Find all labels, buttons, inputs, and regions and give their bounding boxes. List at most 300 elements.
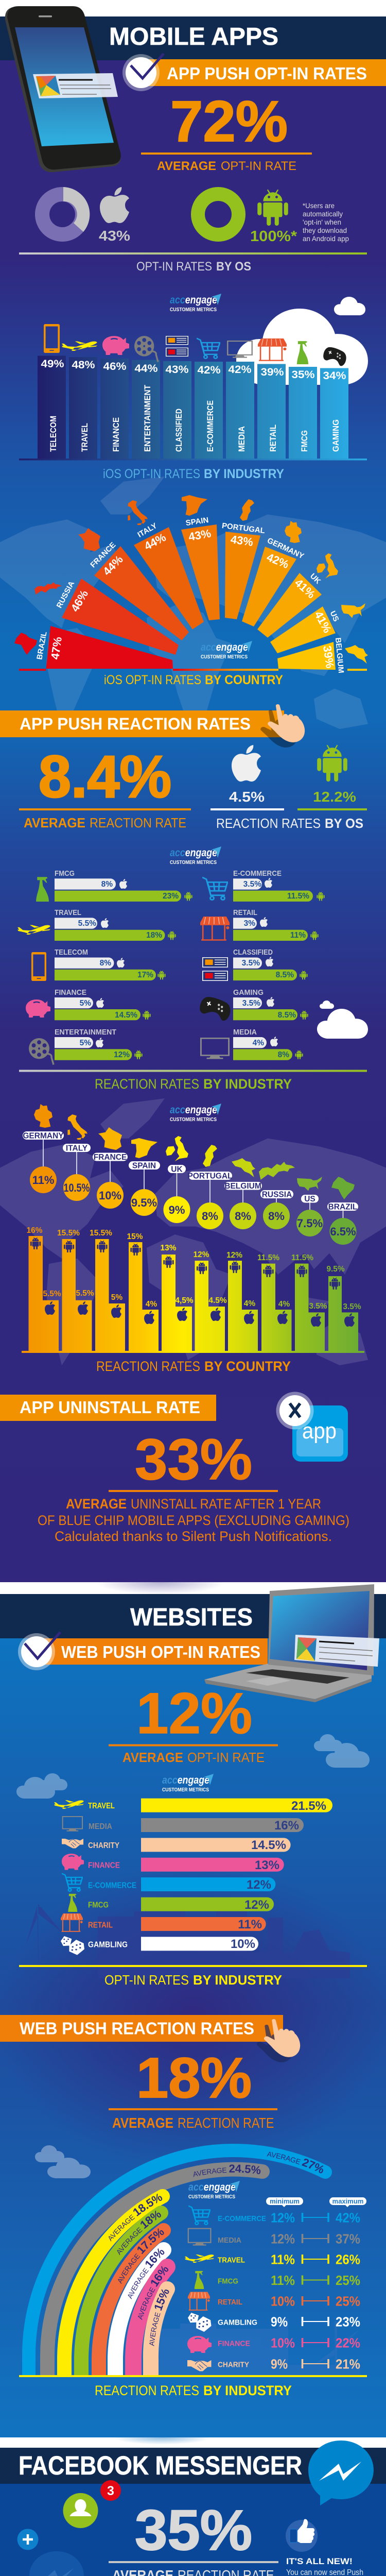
big number 33%: 33%: [135, 1427, 252, 1492]
france: 44%: [100, 553, 126, 578]
retail: 25%: [336, 2294, 360, 2309]
row classified: 3.5%: [242, 959, 260, 968]
logo: accengage: accengage: [188, 2181, 236, 2193]
logo: accengage: [170, 846, 221, 866]
value labels: 11.5%: [291, 1253, 313, 1262]
spain: SPAIN: [185, 516, 209, 528]
brazil: BRAZIL: [35, 631, 49, 660]
caption: reaction rates by industry: [95, 1076, 292, 1092]
bar entertainment: 44%: [135, 363, 158, 375]
row e-commerce: E-COMMERCE: [233, 869, 282, 878]
belgium: BELGIUM: [334, 637, 345, 673]
us: 41%: [312, 609, 334, 635]
world map: [0, 477, 386, 729]
value labels: 5%: [111, 1293, 122, 1302]
bar fmcg: FMCG: [300, 430, 309, 452]
header band: [0, 2448, 386, 2484]
arc labels: AVERAGE 15%: [149, 2289, 169, 2346]
travel: TRAVEL: [218, 2256, 245, 2265]
baseline: [19, 459, 367, 461]
uninstall caption: [38, 1496, 349, 1544]
arc labels: [108, 2151, 324, 2346]
value labels: 12%: [226, 1251, 242, 1260]
fmcg: [68, 1894, 274, 1912]
iOS reaction: [210, 745, 284, 810]
fmcg: 11%: [271, 2273, 295, 2288]
value labels: [26, 1226, 361, 1311]
row classified: CLASSIFIED: [233, 948, 273, 957]
panel: websites: [0, 1584, 386, 2437]
spain: 9.5%: [131, 1196, 157, 1209]
messenger note: IT'S ALL NEW!: [286, 2556, 353, 2566]
row FMCG: [55, 869, 192, 902]
portugal: PORTUGAL: [188, 1172, 232, 1181]
travel: 11%: [271, 2251, 295, 2267]
icon: app tile with close badge: [276, 1392, 348, 1462]
caption: iOS by country: iOS OPT-IN RATES: [104, 673, 201, 687]
banner heading: WEB PUSH REACTION RATES: [20, 2019, 254, 2038]
row retail: 11%: [290, 931, 306, 940]
belgium: BELGIUM: [224, 1182, 261, 1191]
us: 7.5%: [297, 1217, 323, 1230]
caption: reaction rates by industry: REACTION RATES: [95, 1076, 199, 1092]
phone illustration: [5, 6, 121, 172]
portugal: PORTUGAL: [221, 521, 266, 535]
fmcg: FMCG: [218, 2277, 238, 2285]
chart: iOS opt-in by industry: [19, 355, 367, 461]
arc labels: AVERAGE 16%: [138, 2266, 168, 2320]
portugal: [188, 1145, 232, 1229]
value labels: 4%: [146, 1300, 157, 1309]
donut: iOS 43%: [42, 187, 90, 234]
charity: [62, 1838, 291, 1852]
laptop illustration: [204, 1584, 374, 1702]
row media: MEDIA: [233, 1028, 257, 1037]
spain: [181, 516, 220, 620]
row FMCG: 8%: [101, 880, 113, 889]
russia: 46%: [68, 588, 91, 614]
chart: web opt-in by industry: [54, 1799, 332, 1955]
bar fmcg: 35%: [291, 369, 315, 381]
android icons: [30, 1237, 340, 1290]
row travel: [55, 908, 176, 941]
caption: reaction by industry: REACTION RATES: [95, 2383, 199, 2398]
skyline silhouette: [26, 1904, 350, 1978]
bar telecom: TELECOM: [48, 416, 58, 452]
title: FACEBOOK MESSENGER: [19, 2451, 302, 2480]
gambling: 10%: [231, 1937, 255, 1951]
value labels: 9.5%: [326, 1265, 345, 1274]
pill: minimum: minimum: [270, 2197, 300, 2205]
bar classified: [163, 361, 191, 459]
icon: android: [257, 190, 288, 226]
brazil: [35, 626, 173, 669]
row entertainment: 5%: [80, 1039, 91, 1047]
logo: accengage: [170, 294, 221, 313]
spain: SPAIN: [132, 1161, 156, 1171]
caption: opt-in by os: OPT-IN RATES: [136, 260, 212, 274]
finance: 22%: [336, 2335, 360, 2350]
caption: opt-in by industry: [104, 1972, 282, 1988]
finance: 10%: [271, 2335, 295, 2350]
caption: average reaction: [112, 2115, 274, 2131]
caption: average reaction rate: REACTION RATE: [90, 815, 186, 831]
icon: pointing hand: [257, 2019, 300, 2062]
logo: accengage: [201, 641, 252, 660]
value labels: 4%: [244, 1299, 255, 1308]
caption: reaction by os: BY OS: [325, 816, 363, 831]
country silhouettes: [14, 495, 368, 664]
media: 37%: [336, 2231, 360, 2246]
bar finance: [100, 359, 129, 459]
divider: [109, 1744, 278, 1747]
uk: UK: [171, 1165, 183, 1174]
charity: 21%: [336, 2357, 360, 2372]
arc labels: AVERAGE 18%: [117, 2210, 161, 2256]
row retail: RETAIL: [233, 908, 257, 917]
france: FRANCE: [89, 540, 117, 569]
finance: FINANCE: [88, 1861, 120, 1870]
divider: [141, 152, 312, 155]
divider: [19, 252, 367, 255]
header band: [0, 1594, 386, 1638]
white clouds: [236, 297, 368, 385]
chart: reaction by country bubbles: [23, 1104, 358, 1245]
value labels: 16%: [26, 1226, 43, 1235]
bars: [29, 1236, 358, 1351]
e-commerce: 12%: [271, 2210, 295, 2226]
portugal: [221, 521, 266, 619]
caption: average reaction rate: AVERAGE: [24, 815, 85, 831]
russia: [259, 1162, 295, 1229]
retail: RETAIL: [218, 2298, 242, 2307]
big number 72%: 72%: [170, 89, 288, 154]
row gaming: GAMING: [233, 988, 264, 997]
caption: average opt-in: [122, 1750, 265, 1765]
logo: accengage: accengage: [170, 294, 217, 306]
value labels: 11.5%: [257, 1253, 279, 1262]
uninstall caption: Calculated thanks to Silent Push Notifications.: [55, 1529, 332, 1544]
divider: [19, 2375, 367, 2377]
bar classified: 43%: [166, 364, 189, 376]
finance: 13%: [255, 1858, 279, 1872]
donut: Android 100%: [198, 194, 239, 235]
caption: iOS by country: [104, 673, 283, 687]
chart: reaction rates by industry: [55, 869, 325, 1060]
bar entertainment: [132, 360, 160, 459]
media: MEDIA: [89, 1822, 112, 1831]
us: US: [304, 1195, 315, 1204]
value labels: 3.5%: [343, 1302, 361, 1311]
section background: [0, 2484, 386, 2576]
icon: check badge: [18, 1632, 60, 1670]
value labels: 4%: [278, 1300, 290, 1309]
row FMCG: 23%: [163, 892, 179, 901]
france: FRANCE: [94, 1153, 127, 1162]
icon: check badge: [122, 54, 164, 91]
banner heading: APP PUSH OPT-IN RATES: [167, 64, 367, 83]
e-commerce: [188, 2206, 360, 2226]
arc labels: AVERAGE 16%: [128, 2248, 165, 2299]
italy: ITALY: [136, 521, 159, 539]
row gaming: 8.5%: [278, 1011, 296, 1020]
caption: average reaction: [112, 2567, 274, 2576]
caption: reaction rates by industry: BY INDUSTRY: [203, 1076, 292, 1092]
bar travel: TRAVEL: [80, 423, 90, 452]
caption: iOS by industry: BY INDUSTRY: [204, 467, 284, 481]
caption: iOS by industry: [103, 467, 284, 481]
finance: [62, 1854, 284, 1872]
charity: 14.5%: [251, 1838, 286, 1852]
notification card: [294, 1635, 379, 1667]
big number 18%: 18%: [136, 2046, 252, 2110]
bar telecom: 49%: [41, 358, 64, 370]
reaction industry icons: [17, 877, 231, 1064]
row e-commerce: [233, 869, 325, 902]
average opt-in caption: AVERAGE: [157, 159, 216, 173]
divider: [19, 808, 191, 810]
e-commerce: E-COMMERCE: [218, 2214, 266, 2223]
charity: CHARITY: [88, 1841, 120, 1850]
row entertainment: [55, 1028, 143, 1060]
russia: 8%: [268, 1210, 285, 1223]
germany: 11%: [32, 1174, 54, 1187]
bar travel: [69, 357, 97, 459]
logo: accengage: [162, 1774, 214, 1793]
germany: GERMANY: [266, 536, 305, 561]
caption: opt-in by os: BY OS: [216, 260, 251, 274]
android footnote: 'opt-in' when: [303, 218, 341, 226]
belgium: [277, 637, 345, 673]
bar gaming: [320, 368, 348, 459]
caption: reaction by industry: BY INDUSTRY: [203, 2383, 292, 2398]
value labels: 15.5%: [57, 1229, 80, 1238]
value labels: 5.5%: [43, 1290, 61, 1298]
value: iOS 43%: 43%: [99, 228, 130, 244]
media: MEDIA: [218, 2236, 241, 2245]
bar finance: FINANCE: [111, 417, 121, 452]
russia: RUSSIA: [262, 1190, 292, 1199]
bar gaming: GAMING: [331, 419, 341, 452]
brazil: [327, 1177, 358, 1245]
retail: RETAIL: [88, 1921, 113, 1930]
logo: accengage: accengage: [170, 847, 217, 859]
banner: web push opt-in: [41, 1638, 268, 1665]
russia: RUSSIA: [55, 580, 76, 609]
row entertainment: 12%: [114, 1050, 130, 1059]
android footnote: automatically: [303, 210, 343, 218]
value labels: 13%: [160, 1244, 177, 1252]
row travel: 5.5%: [78, 919, 96, 928]
logo: accengage: accengage: [170, 1104, 217, 1116]
value labels: 15.5%: [90, 1229, 112, 1238]
uninstall caption: OF BLUE CHIP MOBILE APPS (EXCLUDING GAMING): [38, 1513, 349, 1528]
caption: average reaction: AVERAGE: [112, 2115, 173, 2131]
chart: rainbow arcs: [22, 2144, 332, 2375]
row travel: 18%: [146, 931, 162, 940]
row classified: [233, 948, 308, 980]
logo: accengage: [170, 1104, 221, 1123]
bar classified: CLASSIFIED: [174, 409, 184, 452]
france: [89, 540, 189, 640]
retail: [61, 1913, 266, 1931]
row media: [233, 1028, 303, 1060]
travel: 26%: [336, 2251, 360, 2267]
row FMCG: FMCG: [55, 869, 75, 878]
caption: iOS by country: BY COUNTRY: [205, 673, 283, 687]
banner: app uninstall rate: [0, 1395, 216, 1421]
charity: 9%: [271, 2357, 288, 2372]
panel: facebook messenger: [0, 2441, 386, 2576]
row entertainment: ENTERTAINMENT: [55, 1028, 116, 1037]
germany: GERMANY: [23, 1131, 64, 1141]
pill: minimum: [266, 2197, 303, 2207]
arc labels: AVERAGE 18.5%: [108, 2194, 163, 2242]
icon: apple: [100, 187, 129, 223]
caption: average reaction rate: [24, 815, 186, 831]
brazil: 6.5%: [330, 1225, 356, 1238]
section background: [0, 1638, 386, 2437]
section shadow: [96, 1570, 225, 1595]
row finance: 5%: [80, 999, 91, 1008]
caption: reaction by country: [96, 1359, 291, 1374]
white clouds: [317, 1001, 368, 1039]
value labels: 12%: [193, 1250, 209, 1259]
media: 16%: [274, 1819, 299, 1833]
retail: [188, 2292, 360, 2310]
travel: [54, 1799, 332, 1813]
divider: [109, 2561, 278, 2563]
uk: 9%: [169, 1204, 185, 1216]
row gaming: 3.5%: [242, 999, 260, 1008]
logo: accengage: CUSTOMER METRICS: [201, 654, 248, 660]
france: 10%: [99, 1189, 121, 1202]
world map: [0, 1098, 386, 1365]
bar media: MEDIA: [237, 426, 247, 452]
apple icons: [45, 1301, 355, 1327]
caption: average reaction: REACTION RATE: [178, 2115, 274, 2131]
media: [62, 1816, 304, 1833]
panel: mobile apps: [0, 6, 386, 1582]
row e-commerce: 11.5%: [287, 892, 309, 901]
bar telecom: [38, 355, 66, 459]
header band: [0, 16, 386, 60]
bar entertainment: ENTERTAINMENT: [143, 384, 152, 452]
table: min and max by industry: [185, 2206, 360, 2372]
pill: maximum: [329, 2197, 366, 2207]
row media: 4%: [253, 1039, 264, 1047]
row travel: TRAVEL: [55, 908, 81, 917]
row telecom: 8%: [100, 959, 111, 968]
uninstall caption: UNINSTALL RATE AFTER 1 YEAR: [131, 1496, 321, 1512]
arc labels: AVERAGE 27%: [267, 2151, 324, 2173]
fmcg: 25%: [336, 2273, 360, 2288]
italy: [134, 521, 204, 630]
russia: [55, 579, 179, 655]
us: [270, 606, 341, 653]
row finance: FINANCE: [55, 988, 86, 997]
icon: pointing hand: [260, 704, 305, 748]
travel: 21.5%: [291, 1799, 326, 1813]
italy: 10.5%: [64, 1181, 90, 1194]
icon: thumbs up: [286, 2519, 318, 2552]
gambling: 23%: [336, 2314, 360, 2330]
bar retail: 39%: [260, 366, 284, 378]
belgium: 39%: [321, 645, 337, 669]
row retail: [233, 908, 319, 941]
fmcg: [195, 2271, 360, 2289]
skyline silhouette: [154, 2318, 360, 2375]
section background: [0, 60, 386, 1582]
brazil: BRAZIL: [328, 1202, 357, 1212]
retail: 10%: [271, 2294, 295, 2309]
bar gaming: 34%: [323, 370, 346, 382]
belgium: [224, 1158, 262, 1229]
fmcg: 12%: [244, 1898, 269, 1912]
icon: notification badge: 3: [107, 2484, 114, 2498]
gambling: [188, 2313, 360, 2332]
big number 12%: 12%: [136, 1681, 252, 1745]
divider: [19, 1965, 367, 1967]
value labels: 4,5%: [175, 1296, 194, 1305]
baseline: [22, 1351, 364, 1353]
title: MOBILE APPS: [109, 23, 278, 50]
messenger note: [286, 2556, 363, 2576]
banner heading: WEB PUSH OPT-IN RATES: [61, 1642, 260, 1662]
industry icons row: [44, 324, 346, 366]
row finance: 14.5%: [115, 1011, 137, 1020]
banner heading: APP UNINSTALL RATE: [20, 1398, 200, 1417]
belgium: 8%: [235, 1210, 251, 1223]
chart: android and iOS bars by country: [22, 1226, 364, 1353]
icon: user avatar: [63, 2493, 98, 2528]
row classified: 8.5%: [276, 971, 294, 979]
banner heading: APP PUSH REACTION RATES: [20, 715, 251, 733]
caption: reaction by os: REACTION RATES: [216, 816, 321, 831]
portugal: 43%: [230, 533, 254, 549]
big number 35%: 35%: [135, 2499, 252, 2562]
e-commerce: 12%: [247, 1878, 271, 1892]
banner: app push opt-in rates: [148, 59, 386, 86]
brazil: 47%: [48, 636, 64, 660]
italy: 44%: [142, 531, 168, 553]
row telecom: TELECOM: [55, 948, 88, 957]
row telecom: 17%: [137, 971, 153, 979]
logo: accengage: CUSTOMER METRICS: [170, 307, 217, 313]
caption: average opt-in: AVERAGE: [122, 1750, 183, 1765]
caption: iOS by industry: iOS OPT-IN RATES: [103, 467, 200, 481]
fmcg: FMCG: [88, 1901, 109, 1909]
android footnote: they download: [303, 226, 347, 234]
bar media: [226, 362, 254, 459]
media: 12%: [271, 2231, 295, 2246]
media: [188, 2228, 360, 2246]
germany: 42%: [265, 551, 291, 571]
e-commerce: E-COMMERCE: [88, 1882, 136, 1890]
gambling: 9%: [271, 2314, 288, 2330]
row gaming: [233, 988, 308, 1020]
caption: reaction by country: BY COUNTRY: [204, 1359, 291, 1374]
e-commerce: 42%: [336, 2210, 360, 2226]
gambling: GAMBLING: [218, 2318, 257, 2327]
row retail: 3%: [244, 919, 255, 928]
uninstall caption: AVERAGE: [66, 1496, 127, 1512]
logo: accengage: accengage: [201, 641, 248, 653]
row media: 8%: [278, 1050, 289, 1059]
germany: [242, 536, 305, 626]
translucent clouds: [16, 1734, 370, 1799]
icon: app tile with close badge: app: [302, 1418, 337, 1444]
